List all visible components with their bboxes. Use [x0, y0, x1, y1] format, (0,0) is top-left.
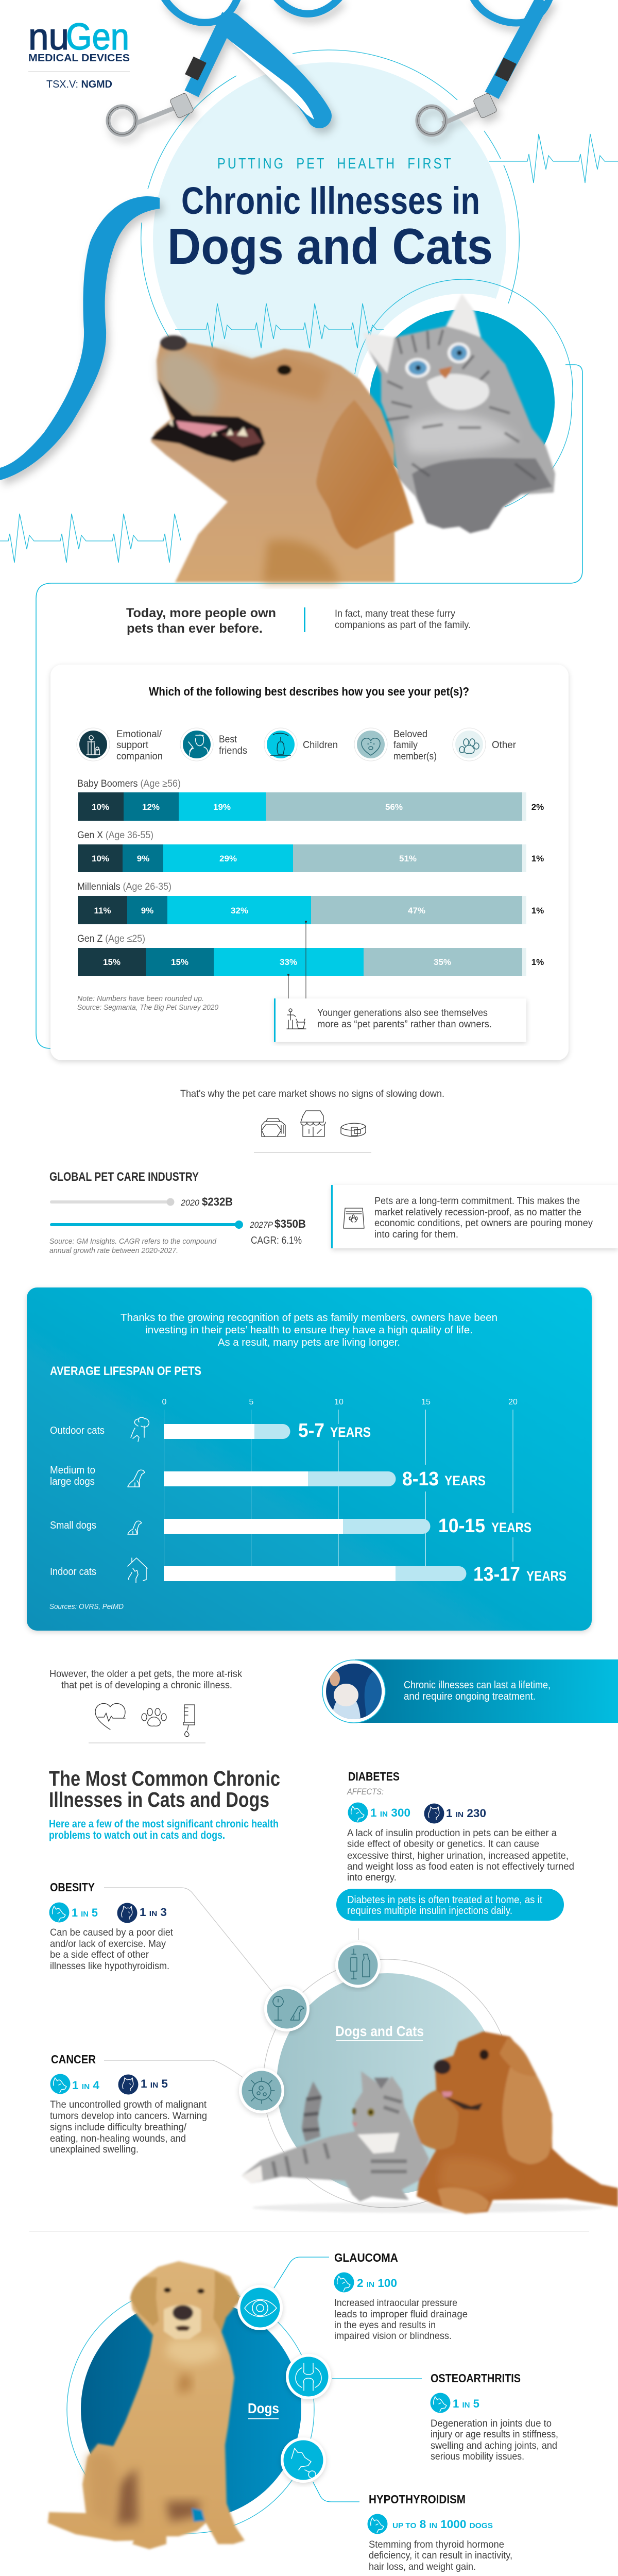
disease: cancer: signs include difficulty breathing/	[50, 2122, 187, 2133]
older pets text: However, the older a pet gets, the more at-risk	[49, 1669, 242, 1680]
photo: cat and spaniel	[242, 2031, 618, 2214]
intro heading: pets than ever before.	[127, 621, 263, 636]
disease: hypothyroidism: UP TO 8 IN 1000 DOGS	[392, 2518, 493, 2531]
legend: member(s)	[393, 751, 437, 762]
bar row: Baby Boomers: 10%	[92, 802, 109, 812]
intro text	[335, 608, 471, 631]
global pet care industry chart: CAGR: 6.1%	[251, 1235, 302, 1246]
axis	[162, 1398, 518, 1581]
legend: friends	[219, 745, 247, 756]
section heading: Illnesses in Cats and Dogs	[49, 1788, 269, 1811]
legend: support	[116, 740, 149, 751]
bar row: Baby Boomers: 12%	[142, 802, 160, 812]
bar: Small dogs	[50, 1515, 531, 1537]
intro heading: Today, more people own	[126, 606, 276, 620]
logo top left	[28, 16, 130, 90]
section: hero and survey	[0, 0, 618, 1255]
circle	[277, 1973, 498, 2195]
disease: diabetes	[347, 1770, 574, 1883]
section heading: The Most Common Chronic	[49, 1767, 280, 1790]
disease: obesity: 1 IN 5	[72, 1906, 98, 1919]
icon: syringe	[335, 1942, 381, 1988]
bar: Small dogs: YEARS	[491, 1520, 531, 1535]
disease: cancer: The uncontrolled growth of malignant	[50, 2099, 207, 2110]
section subheading: Here are a few of the most significant chronic health	[49, 1818, 279, 1830]
disease: diabetes: DIABETES	[348, 1770, 400, 1783]
axis: 20	[508, 1398, 518, 1406]
cat white surround	[355, 294, 571, 510]
bar: Indoor cats: YEARS	[526, 1568, 566, 1584]
callout: recession-proof: into caring for them.	[374, 1229, 458, 1240]
icon: thyroid dog	[281, 2437, 326, 2483]
disease: diabetes: excessive thirst, higher urination, increased appetite,	[347, 1851, 569, 1861]
bar row: Gen Z: 15%	[171, 957, 188, 967]
disease: cancer: unexplained swelling.	[50, 2144, 139, 2155]
bar row: Baby Boomers: 2%	[531, 802, 544, 812]
bar: Medium to large dogs: large dogs	[50, 1476, 95, 1487]
disease: hypothyroidism	[368, 2493, 512, 2572]
bar row: Gen Z	[77, 934, 544, 976]
global pet care industry chart	[49, 1170, 306, 1255]
leash right strap and clip	[418, 0, 550, 134]
cat blue circle	[369, 310, 555, 495]
hero outer ring	[141, 50, 519, 338]
market icons	[262, 1111, 366, 1137]
ring	[263, 1959, 511, 2208]
callout: recession-proof: Pets are a long-term commitment. This makes the	[374, 1196, 580, 1207]
disease: diabetes: A lack of insulin production in pets can be either a	[347, 1828, 557, 1839]
photo: grey tabby cat hero	[364, 294, 555, 533]
disease: osteoarthritis: 1 IN 5	[453, 2397, 479, 2410]
disease: diabetes: into energy.	[347, 1872, 397, 1883]
circle	[81, 2299, 301, 2519]
banner: chronic illnesses: Chronic illnesses can last a lifetime,	[404, 1680, 551, 1691]
bar row: Millennials: Millennials (Age 26-35)	[77, 882, 171, 892]
connectors	[274, 2257, 422, 2502]
title: Chronic Illnesses in	[181, 179, 480, 222]
axis: 0	[162, 1398, 167, 1406]
bar: Outdoor cats	[50, 1417, 371, 1442]
disease: obesity: 1 IN 3	[140, 1906, 167, 1919]
heartbeat line centre	[175, 303, 384, 348]
panel frame line	[36, 365, 582, 1048]
disease: glaucoma: in the eyes and results in	[334, 2320, 436, 2331]
disease: diabetes: and weight loss as food eaten is not effectively turned	[347, 1861, 574, 1872]
logo top left: Gen	[66, 16, 129, 58]
axis: 5	[249, 1398, 254, 1406]
section subheading	[49, 1818, 279, 1841]
bar row: Millennials: 11%	[94, 906, 111, 916]
bar row: Millennials: 47%	[408, 906, 425, 916]
leash left strap and clip	[108, 0, 340, 134]
callout: recession-proof: market relatively recession-proof, as no matter the	[374, 1207, 581, 1218]
global pet care industry chart: 2027P	[249, 1220, 273, 1230]
disease: glaucoma: leads to improper fluid drainage	[334, 2309, 468, 2320]
panel: lifespan	[27, 1287, 592, 1631]
callout pill: diabetes	[336, 1889, 564, 1921]
bar row: Gen X: 9%	[137, 854, 149, 863]
title	[167, 179, 493, 275]
bar row: Gen Z: 1%	[531, 957, 544, 967]
disease: obesity: and/or lack of exercise. May	[50, 1939, 166, 1950]
older pets text: that pet is of developing a chronic illness.	[61, 1680, 232, 1691]
legend: family	[393, 740, 418, 751]
bar row: Gen Z: 15%	[103, 957, 121, 967]
disease: cancer	[50, 2053, 207, 2155]
bar row: Millennials: 1%	[531, 906, 544, 916]
legend: Other	[492, 740, 517, 751]
disease: diabetes: 1 IN 300	[370, 1806, 410, 1819]
older pets text	[49, 1669, 242, 1691]
tagline: PUTTING PET HEALTH FIRST	[217, 156, 453, 172]
market divider	[254, 1152, 371, 1153]
bar row: Baby Boomers: Baby Boomers (Age ≥56)	[77, 778, 181, 789]
lifespan intro text: Thanks to the growing recognition of pets as family members, owners have been	[121, 1312, 497, 1324]
disease: glaucoma: GLAUCOMA	[334, 2251, 398, 2264]
bar row: Gen Z: 35%	[434, 957, 451, 967]
disease: osteoarthritis: serious mobility issues.	[431, 2451, 524, 2462]
callout pill: diabetes: Diabetes in pets is often treated at home, as it	[347, 1894, 542, 1906]
callout: recession-proof	[331, 1185, 618, 1248]
icon: joint	[286, 2354, 331, 2399]
axis: 10	[334, 1398, 344, 1406]
section heading	[49, 1767, 280, 1811]
disease: hypothyroidism: deficiency, it can result in inactivity,	[369, 2550, 512, 2561]
disease: obesity: Can be caused by a poor diet	[50, 1927, 174, 1938]
lifespan intro text	[121, 1312, 497, 1348]
section: common illnesses	[49, 1659, 618, 2215]
hero section	[0, 0, 618, 1048]
lifespan intro text: investing in their pets’ health to ensure they have a high quality of life.	[145, 1325, 473, 1336]
bar row: Baby Boomers: 56%	[385, 802, 403, 812]
global pet care industry chart: $350B	[274, 1217, 306, 1230]
disease: diabetes: AFFECTS:	[347, 1787, 384, 1797]
disease: obesity	[49, 1880, 174, 1972]
callout: pet parents: Younger generations also see themselves	[317, 1008, 488, 1019]
heartbeat line bottom left	[0, 514, 181, 563]
disease: osteoarthritis: OSTEOARTHRITIS	[431, 2371, 521, 2385]
disease: osteoarthritis: injury or age results in stiffness,	[431, 2429, 558, 2440]
bar row: Gen X: 10%	[92, 854, 109, 863]
banner: chronic illnesses: and require ongoing treatment.	[404, 1691, 536, 1702]
disease: obesity: be a side effect of other	[50, 1950, 149, 1960]
section subheading: problems to watch out in cats and dogs.	[49, 1829, 225, 1841]
white gap	[72, 2290, 311, 2529]
older pets divider	[89, 1742, 205, 1743]
bar: Indoor cats	[50, 1558, 566, 1585]
disease: glaucoma: 2 IN 100	[357, 2277, 397, 2290]
intro divider bar	[304, 607, 305, 632]
survey question: Which of the following best describes how you see your pet(s)?	[149, 685, 469, 698]
icon: cancer cell	[239, 2068, 284, 2113]
legend	[77, 728, 517, 762]
legend: Children	[303, 740, 338, 751]
hero light circle	[153, 62, 506, 416]
callout: pet parents: more as “pet parents” rather than owners.	[317, 1019, 492, 1030]
global pet care industry chart: annual growth rate between 2020-2027.	[49, 1246, 178, 1255]
photo: sitting golden retriever	[48, 2261, 245, 2549]
disease: glaucoma: Increased intraocular pressure	[334, 2298, 457, 2309]
bar: Outdoor cats: YEARS	[330, 1425, 371, 1440]
bar row: Millennials: 32%	[231, 906, 248, 916]
bar row: Millennials: 9%	[141, 906, 153, 916]
logo top left: MEDICAL DEVICES	[28, 53, 130, 64]
disease: osteoarthritis: Degeneration in joints due to	[431, 2418, 552, 2429]
callout: recession-proof: economic conditions, pet owners are pouring money	[374, 1218, 593, 1229]
disease: diabetes: side effect of obesity or genetics. It can cause	[347, 1839, 539, 1850]
section: dog illnesses	[29, 2231, 589, 2572]
bar row: Baby Boomers: 19%	[213, 802, 231, 812]
disease: cancer: 1 IN 5	[141, 2077, 168, 2090]
global pet care industry chart: Source: GM Insights. CAGR refers to the compound	[49, 1237, 217, 1246]
bar row: Gen Z: 33%	[280, 957, 297, 967]
legend: companion	[116, 751, 163, 762]
disease: obesity: illnesses like hypothyroidism.	[50, 1961, 169, 1972]
disease: osteoarthritis	[431, 2371, 558, 2462]
bar: Indoor cats: 13-17	[473, 1564, 520, 1585]
bar row: Gen X: 1%	[531, 854, 544, 863]
disease: cancer: 1 IN 4	[72, 2079, 100, 2092]
leash long left	[0, 196, 160, 480]
icon: eye	[237, 2285, 283, 2330]
disease: obesity: OBESITY	[50, 1880, 95, 1894]
circle label: Dogs and Cats	[335, 2023, 424, 2039]
bar: Medium to large dogs: 8-13	[402, 1468, 439, 1490]
bar row: Baby Boomers	[77, 778, 544, 821]
disease: hypothyroidism: Stemming from thyroid hormone	[369, 2539, 504, 2550]
icon: scale and dog	[264, 1986, 310, 2031]
survey note: Note: Numbers have been rounded up.	[77, 994, 204, 1003]
lifespan heading: AVERAGE LIFESPAN OF PETS	[50, 1364, 201, 1378]
logo top left: nu	[28, 16, 69, 58]
disease: cancer: CANCER	[51, 2053, 96, 2066]
bar row: Gen X: 51%	[399, 854, 417, 863]
disease: cancer: tumors develop into cancers. Warning	[50, 2111, 207, 2122]
connectors	[104, 1888, 358, 2077]
callout pill: diabetes: requires multiple insulin injections daily.	[347, 1905, 512, 1917]
photo: golden retriever hero	[151, 335, 414, 582]
label: Dogs	[248, 2400, 279, 2416]
bar: Outdoor cats: Outdoor cats	[50, 1425, 105, 1436]
callout: pet parents	[274, 921, 526, 1042]
disease: hypothyroidism: HYPOTHYROIDISM	[369, 2493, 466, 2506]
heartbeat line right	[489, 134, 618, 183]
banner: chronic illnesses	[322, 1659, 618, 1723]
dogs and cats diagram	[104, 1888, 618, 2214]
global pet care industry chart: $232B	[202, 1195, 233, 1208]
bar row: Gen Z: Gen Z (Age ≤25)	[77, 934, 145, 944]
global pet care industry chart: 2020	[180, 1198, 200, 1208]
section divider	[29, 2231, 589, 2232]
bar: Small dogs: Small dogs	[50, 1520, 96, 1531]
legend: Emotional/	[116, 729, 162, 740]
survey note	[77, 994, 219, 1012]
bar row: Gen X	[77, 830, 544, 872]
panel: survey card	[50, 665, 569, 1060]
disease: diabetes: 1 IN 230	[446, 1807, 486, 1820]
survey note: Source: Segmanta, The Big Pet Survey 2020	[77, 1003, 219, 1012]
older pets icons	[95, 1703, 195, 1737]
disease: glaucoma: impaired vision or blindness.	[334, 2331, 452, 2342]
disease: glaucoma	[334, 2251, 468, 2342]
disease: osteoarthritis: swelling and aching joints, and	[431, 2441, 557, 2451]
bar row: Gen X: 29%	[219, 854, 237, 863]
bar: Medium to large dogs	[50, 1465, 486, 1490]
bar: Small dogs: 10-15	[438, 1515, 485, 1537]
cat ring	[355, 279, 573, 507]
bar: Indoor cats: Indoor cats	[50, 1566, 96, 1578]
intro heading	[126, 606, 276, 636]
lifespan intro text: As a result, many pets are living longer.	[218, 1337, 400, 1348]
bar row: Millennials	[77, 882, 544, 924]
bar: Outdoor cats: 5-7	[298, 1420, 324, 1442]
section: lifespan	[25, 1287, 594, 1634]
legend: Beloved	[393, 729, 427, 740]
disease: cancer: eating, non-healing wounds, and	[50, 2133, 186, 2144]
intro text: In fact, many treat these furry	[335, 608, 455, 619]
ring	[67, 2286, 314, 2533]
market lead-in text: That's why the pet care market shows no signs of slowing down.	[180, 1089, 444, 1099]
global pet care industry chart: GLOBAL PET CARE INDUSTRY	[49, 1170, 199, 1184]
dogs diagram	[48, 2257, 422, 2549]
title: Dogs and Cats	[167, 218, 493, 275]
disease: hypothyroidism: hair loss, and weight gain.	[369, 2562, 476, 2572]
intro text: companions as part of the family.	[335, 620, 471, 631]
bar row: Gen X: Gen X (Age 36-55)	[77, 830, 153, 841]
bar: Medium to large dogs: Medium to	[50, 1465, 95, 1476]
legend: Best	[219, 734, 237, 745]
white ring gap	[268, 1964, 507, 2204]
lifespan source: Sources: OVRS, PetMD	[49, 1602, 124, 1611]
bar: Medium to large dogs: YEARS	[444, 1473, 486, 1488]
logo top left: TSX.V: NGMD	[46, 79, 112, 90]
axis: 15	[421, 1398, 431, 1406]
